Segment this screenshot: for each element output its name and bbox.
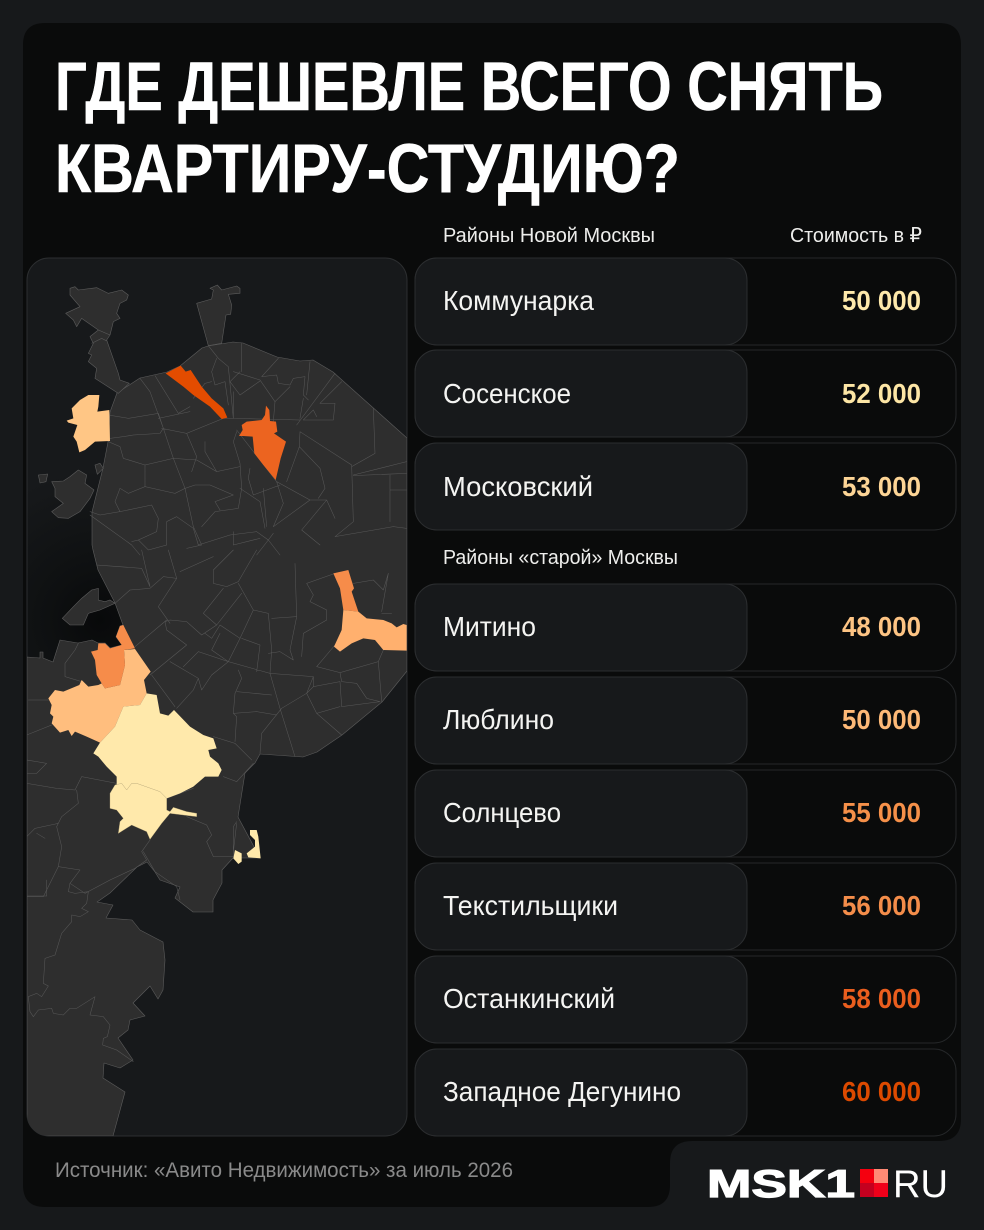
source note: Источник: «Авито Недвижимость» за июль 2026 [55,1159,513,1182]
map land: south-western exclave [62,588,115,625]
logo: MSK1.RU: RU [893,1163,948,1206]
row: Останкинский [415,956,956,1043]
map: far south borders [27,880,133,1062]
row: Западное Дегунино: 60 000 [842,1076,921,1107]
row: Останкинский: 58 000 [842,983,921,1014]
district: Сосенское [110,783,197,839]
row: Сосенское: 52 000 [842,378,921,409]
column heading: cost: Стоимость в ₽ [790,225,922,247]
map panel background [27,258,407,1136]
map highlights: north districts [67,366,286,480]
district: Останкинский [239,406,286,480]
row: Западное Дегунино [415,1049,956,1136]
logo: MSK1.RU: MSK1 [707,1163,855,1206]
row: Сосенское: Сосенское [443,378,571,409]
district: Митино [67,395,110,452]
row: Останкинский: Останкинский [443,983,615,1014]
row: Текстильщики [415,863,956,950]
row: Люблино [415,677,956,764]
row: Сосенское [415,350,956,437]
map highlights: south districts [48,570,407,864]
row: Митино: 48 000 [842,611,921,642]
district: Коммунарка [93,693,222,798]
district: Западное Дегунино [166,366,227,419]
row: Московский [415,443,956,530]
logo: MSK1.RU [707,1163,948,1206]
row: Коммунарка: Коммунарка [443,285,594,316]
row: Коммунарка [415,258,956,345]
panel: map of Moscow districts [27,258,407,1136]
row: Митино: Митино [443,611,536,642]
title: КВАРТИРУ-СТУДИЮ? [55,130,680,207]
section heading: old Moscow districts: Районы «старой» Москвы [443,547,678,569]
map: district borders south [27,550,392,900]
row: Люблино: 50 000 [842,704,921,735]
row: Московский: Московский [443,471,593,502]
row: Солнцево [415,770,956,857]
row: Текстильщики: Текстильщики [443,890,618,921]
map land: main area [27,342,407,1136]
row: Московский: 53 000 [842,471,921,502]
logo: red square [860,1169,888,1197]
district: Текстильщики [333,570,358,612]
row: Коммунарка: 50 000 [842,285,921,316]
map: districts [27,285,407,1136]
column heading: New Moscow districts: Районы Новой Москвы [443,225,655,247]
row: Текстильщики: 56 000 [842,890,921,921]
title [55,48,883,207]
district: Солнцево [91,625,135,688]
row: Западное Дегунино: Западное Дегунино [443,1076,681,1107]
district: Люблино [334,610,407,652]
map land: northern and western exclaves [38,285,240,518]
district: Московский [48,649,151,743]
row: Солнцево: Солнцево [443,797,561,828]
row: Солнцево: 55 000 [842,797,921,828]
district: Сосенское exclave [233,830,261,864]
row: Митино [415,584,956,671]
map: district borders north [90,343,407,555]
row: Люблино: Люблино [443,704,554,735]
